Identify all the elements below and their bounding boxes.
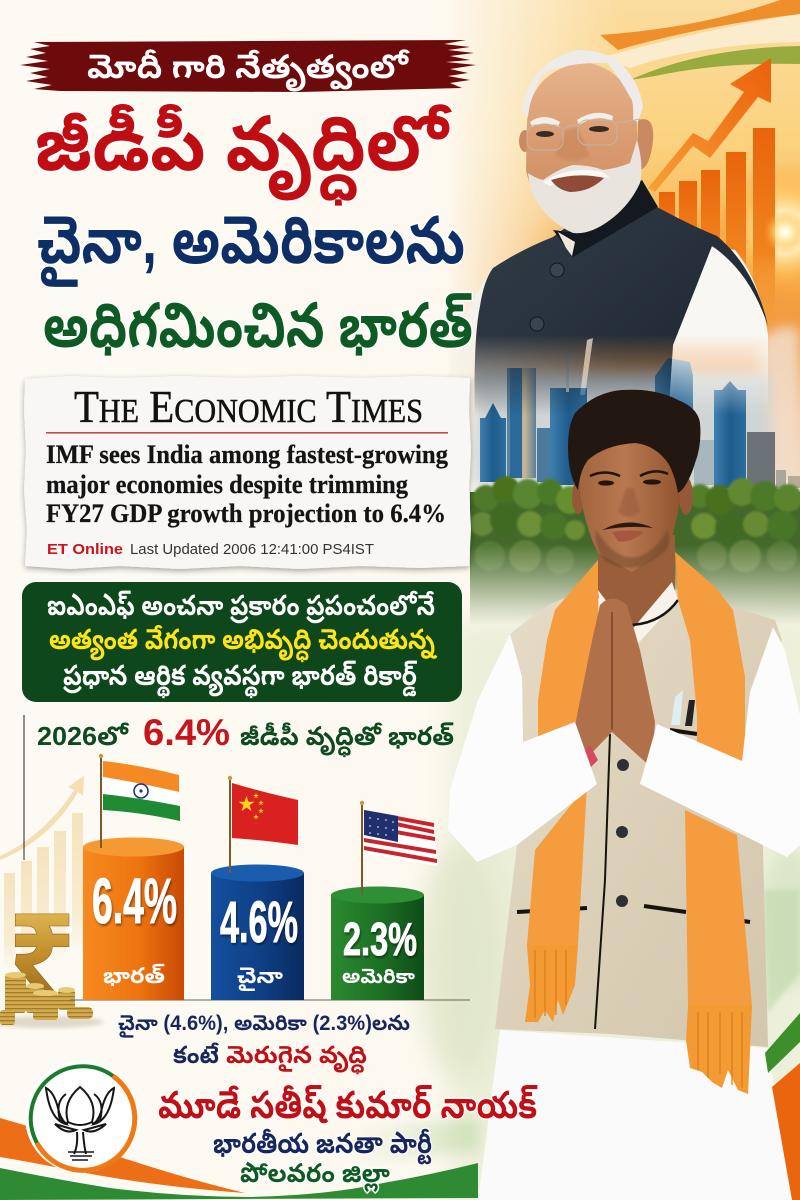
top right tricolour swoosh — [600, 0, 800, 80]
main heading: జీడీపీ వృద్ధిలో — [35, 102, 453, 206]
lower pale green mist — [450, 620, 800, 1200]
pale growth decoration — [0, 715, 84, 968]
chart heading: జీడీపీ వృద్ధితో భారత్ — [240, 721, 454, 758]
USA bar: అమెరికా — [342, 966, 415, 988]
hair — [568, 390, 700, 493]
nose — [618, 488, 640, 517]
face — [526, 62, 640, 230]
China bar: చైనా — [237, 963, 283, 991]
head — [568, 390, 700, 572]
nose — [555, 128, 590, 161]
portrait: Moode Satish Kumar Nayak — [448, 390, 800, 1200]
right green — [765, 1013, 800, 1073]
beard — [528, 140, 641, 233]
flag: China: ★ — [238, 795, 255, 814]
rupee symbol: ₹ — [11, 884, 73, 1018]
rupee and coins — [0, 884, 104, 1028]
byline: ET Online — [47, 541, 123, 558]
jacket — [475, 180, 768, 420]
main heading — [35, 102, 473, 361]
brows and eyes — [590, 471, 668, 476]
top banner — [20, 40, 476, 92]
news clipping: Last Updated 2006 12:41:00 PS4IST — [130, 542, 374, 558]
shirt collar — [598, 582, 678, 650]
BJP lotus logo — [25, 1061, 137, 1173]
China bar — [211, 864, 304, 1000]
folded hands — [575, 598, 655, 768]
ears — [572, 480, 584, 514]
headline: FY27 GDP growth projection to 6.4% — [46, 499, 446, 528]
caption: చైనా (4.6%), అమెరికా (2.3%)లను — [118, 1012, 410, 1038]
vest — [495, 585, 782, 1047]
mustache — [602, 522, 653, 530]
trees — [470, 476, 800, 632]
brush stroke — [20, 40, 476, 92]
main heading: చైనా, అమెరికాలను — [37, 203, 465, 287]
candidate name — [158, 1084, 538, 1193]
headline: major economies despite trimming — [46, 470, 408, 499]
top banner: మోదీ గారి నేతృత్వంలో — [87, 48, 410, 91]
head — [519, 50, 653, 233]
USA bar — [331, 886, 424, 1000]
portrait: Narendra Modi — [449, 50, 768, 420]
candidate name: భారతీయ జనతా పార్టీ — [213, 1128, 432, 1165]
rising bar chart and arrow — [648, 58, 800, 338]
masthead: THE ECONOMIC TIMES — [74, 381, 423, 432]
India bar — [83, 838, 184, 1000]
eyes — [536, 131, 554, 137]
green message box: ప్రధాన ఆర్థిక వ్యవస్థగా భారత్ రికార్డ్ — [63, 660, 417, 699]
caption: కంటే — [173, 1042, 220, 1069]
left green — [0, 1163, 478, 1200]
sunrise sky — [430, 0, 800, 480]
growth arrow — [648, 58, 771, 192]
India bar: 6.4% — [92, 865, 177, 937]
flag: China: ★ — [253, 793, 259, 800]
mouth — [551, 175, 604, 192]
right orange — [772, 1063, 800, 1200]
coin shadow — [0, 1016, 104, 1028]
buttons — [617, 759, 629, 771]
bottom tricolour swooshes — [0, 1013, 800, 1200]
scarf right — [675, 552, 745, 770]
green message box: ఐఎంఎఫ్ అంచనా ప్రకారం ప్రపంచంలోనే — [47, 590, 435, 624]
left sleeve — [448, 634, 597, 862]
bar chart — [70, 754, 470, 1000]
lips — [612, 530, 644, 542]
collar piping — [627, 600, 678, 625]
candidate name: పోలవరం జిల్లా — [240, 1158, 390, 1193]
scarf left — [538, 560, 598, 745]
flag: USA — [360, 801, 437, 895]
flag: China: ★ — [258, 808, 264, 815]
headline — [46, 440, 448, 528]
coin stacks — [5, 975, 26, 1013]
caption — [118, 1012, 410, 1075]
chart heading — [37, 712, 454, 758]
left sleeve — [458, 268, 493, 377]
main heading: అధిగమించిన భారత్ — [43, 292, 473, 361]
skyline — [475, 352, 800, 488]
USA bar: 2.3% — [343, 913, 417, 965]
pale green haze — [340, 1118, 478, 1168]
caption: మెరుగైన వృద్ధి — [226, 1042, 367, 1075]
candidate name: మూడే సతీష్ కుమార్ నాయక్ — [158, 1084, 538, 1127]
China bar: 4.6% — [220, 890, 298, 955]
flag: India — [99, 754, 180, 848]
body with jacket and kurta — [449, 180, 768, 420]
right sleeve — [668, 245, 768, 420]
left orange — [0, 1118, 245, 1193]
placket — [595, 734, 610, 1029]
eyebrows — [530, 117, 560, 127]
green message box — [22, 582, 462, 702]
India bar: భారత్ — [103, 963, 165, 988]
face — [580, 436, 680, 572]
baseline shadow — [70, 999, 470, 1001]
glasses — [527, 119, 640, 150]
kurta lower — [478, 1030, 792, 1200]
hair — [522, 50, 643, 122]
right sleeve — [640, 627, 800, 857]
flag: China — [228, 776, 298, 873]
pens — [671, 690, 683, 725]
torn paper — [24, 376, 471, 569]
green message box: అత్యంత వేగంగా అభివృద్ధి చెందుతున్న — [49, 624, 438, 663]
stubble — [596, 530, 669, 568]
headline: IMF sees India among fastest-growing — [46, 440, 448, 469]
collar — [553, 180, 658, 257]
ears — [638, 119, 653, 170]
news clipping — [24, 376, 471, 569]
lotus — [46, 1087, 114, 1160]
flag: China: ★ — [258, 800, 264, 807]
neck — [598, 535, 675, 630]
chart heading: 2026లో — [37, 721, 130, 751]
background — [409, 0, 800, 1200]
pockets — [517, 730, 750, 922]
flag: China: ★ — [253, 814, 259, 821]
chart heading: 6.4% — [143, 712, 230, 753]
